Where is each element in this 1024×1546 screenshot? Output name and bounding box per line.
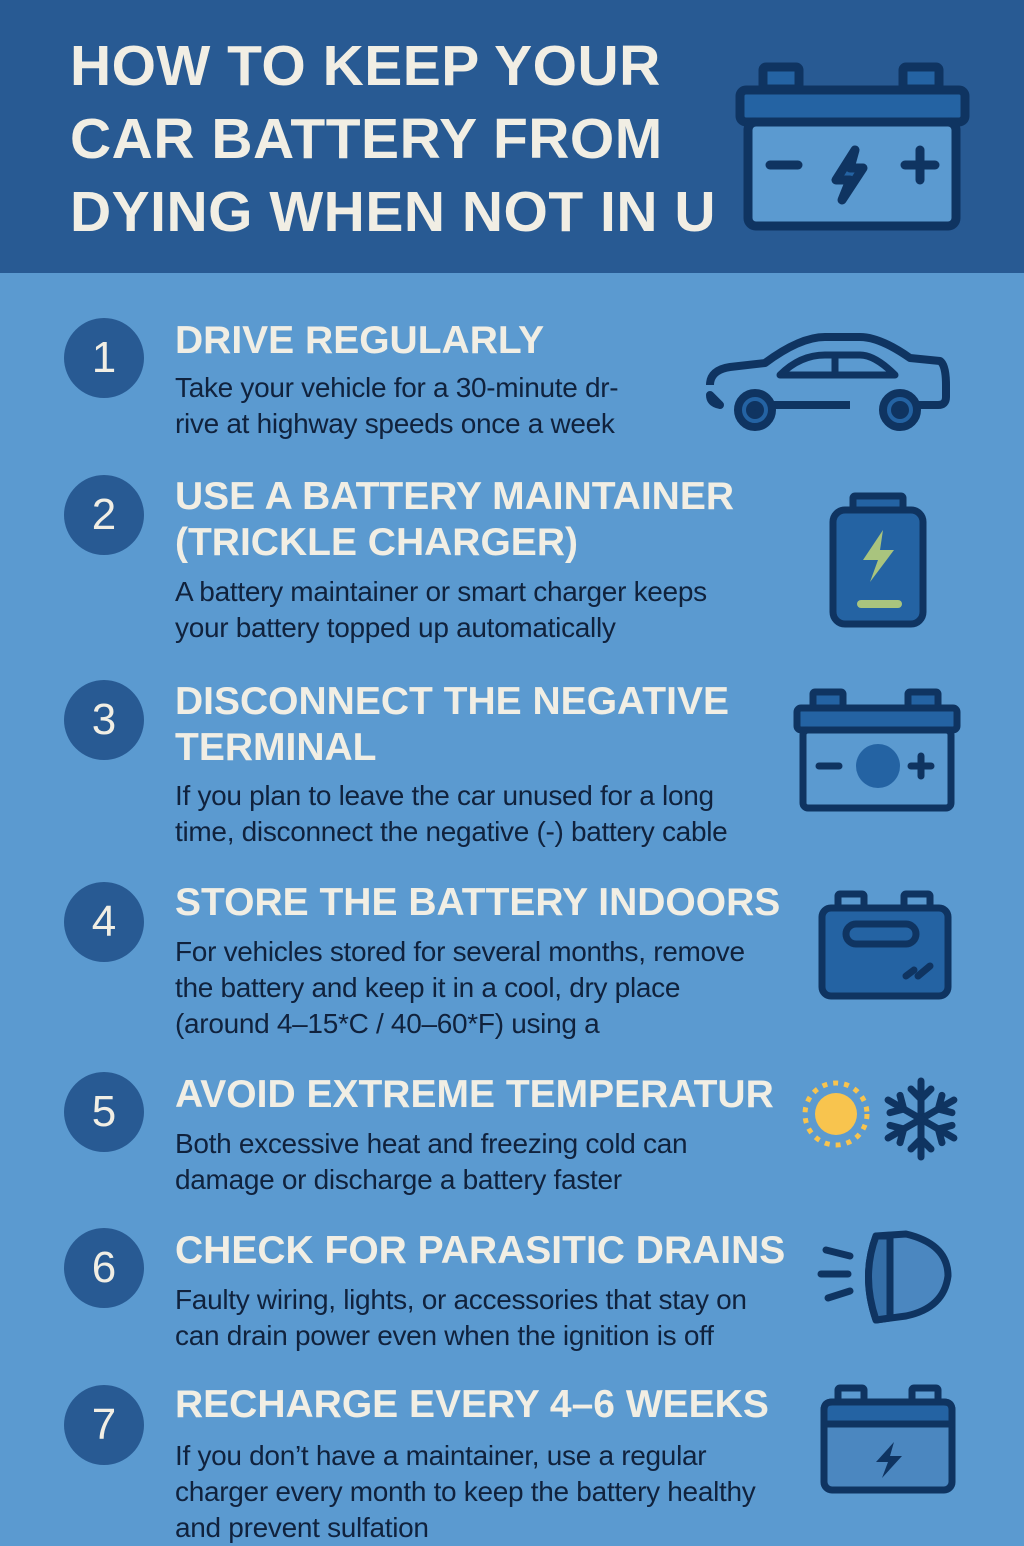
heading 4: STORE THE BATTERY INDOORS (175, 881, 780, 924)
icon: sun (802, 1080, 870, 1148)
item 1 (64, 318, 950, 439)
icon: snowflake (884, 1078, 958, 1160)
body 7: and prevent sulfation (175, 1512, 429, 1543)
number 1: 1 (92, 333, 116, 382)
number 6: 6 (92, 1243, 116, 1292)
body 5: damage or discharge a battery faster (175, 1164, 622, 1195)
item 4 (64, 881, 952, 1039)
number 6 (64, 1228, 144, 1308)
body 2: your battery topped up automatically (175, 612, 616, 643)
icon: car (706, 333, 950, 431)
heading 2 (175, 475, 734, 564)
number 7 (64, 1385, 144, 1465)
body 1: Take your vehicle for a 30-minute dr- (175, 372, 618, 403)
icon: headlight (818, 1230, 952, 1324)
body 4: (around 4–15*C / 40–60*F) using a (175, 1008, 599, 1039)
body 6: can drain power even when the ignition is off (175, 1320, 714, 1351)
icon: maintainer (830, 492, 926, 628)
heading 3 (175, 680, 729, 769)
heading 3: DISCONNECT THE NEGATIVE (175, 680, 729, 723)
number 3: 3 (92, 695, 116, 744)
body 1 (175, 372, 618, 439)
title: HOW TO KEEP YOUR (70, 34, 661, 98)
number 7: 7 (92, 1400, 116, 1449)
body 1: rive at highway speeds once a week (175, 408, 615, 439)
heading 7: RECHARGE EVERY 4–6 WEEKS (175, 1383, 769, 1426)
title: DYING WHEN NOT IN U (70, 180, 716, 244)
heading 1: DRIVE REGULARLY (175, 319, 544, 362)
body 7: If you don’t have a maintainer, use a regular (175, 1440, 706, 1471)
body 4: the battery and keep it in a cool, dry place (175, 972, 680, 1003)
heading 5: AVOID EXTREME TEMPERATUR (175, 1073, 774, 1116)
heading 3: TERMINAL (175, 726, 376, 769)
body 3: time, disconnect the negative (-) battery cable (175, 816, 727, 847)
heading 6: CHECK FOR PARASITIC DRAINS (175, 1229, 785, 1272)
icon: header battery (736, 62, 970, 230)
title (70, 34, 716, 244)
body 3: If you plan to leave the car unused for a long (175, 780, 714, 811)
icon: stored battery (818, 890, 952, 1000)
body 4 (175, 936, 745, 1039)
body 6: Faulty wiring, lights, or accessories that stay on (175, 1284, 747, 1315)
number 4 (64, 882, 144, 962)
number 4: 4 (92, 897, 116, 946)
number 2: 2 (92, 490, 116, 539)
item 6 (64, 1228, 952, 1351)
item 2 (64, 475, 926, 643)
number 2 (64, 475, 144, 555)
body 5 (175, 1128, 687, 1195)
body 5: Both excessive heat and freezing cold can (175, 1128, 687, 1159)
item 7 (64, 1383, 956, 1543)
icon: recharge battery (820, 1384, 956, 1494)
number 5 (64, 1072, 144, 1152)
item 5 (64, 1072, 958, 1195)
body 7 (175, 1440, 756, 1543)
heading 2: USE A BATTERY MAINTAINER (175, 475, 734, 518)
body 7: charger every month to keep the battery healthy (175, 1476, 755, 1507)
icon: battery terminal (794, 688, 960, 812)
title: CAR BATTERY FROM (70, 107, 663, 171)
body 2: A battery maintainer or smart charger keeps (175, 576, 707, 607)
number 5: 5 (92, 1087, 116, 1136)
header band (0, 0, 1024, 273)
body 4: For vehicles stored for several months, remove (175, 936, 745, 967)
body 3 (175, 780, 727, 847)
body 2 (175, 576, 707, 643)
body 6 (175, 1284, 747, 1351)
number 1 (64, 318, 144, 398)
item 3 (64, 680, 960, 847)
heading 2: (TRICKLE CHARGER) (175, 521, 578, 564)
number 3 (64, 680, 144, 760)
